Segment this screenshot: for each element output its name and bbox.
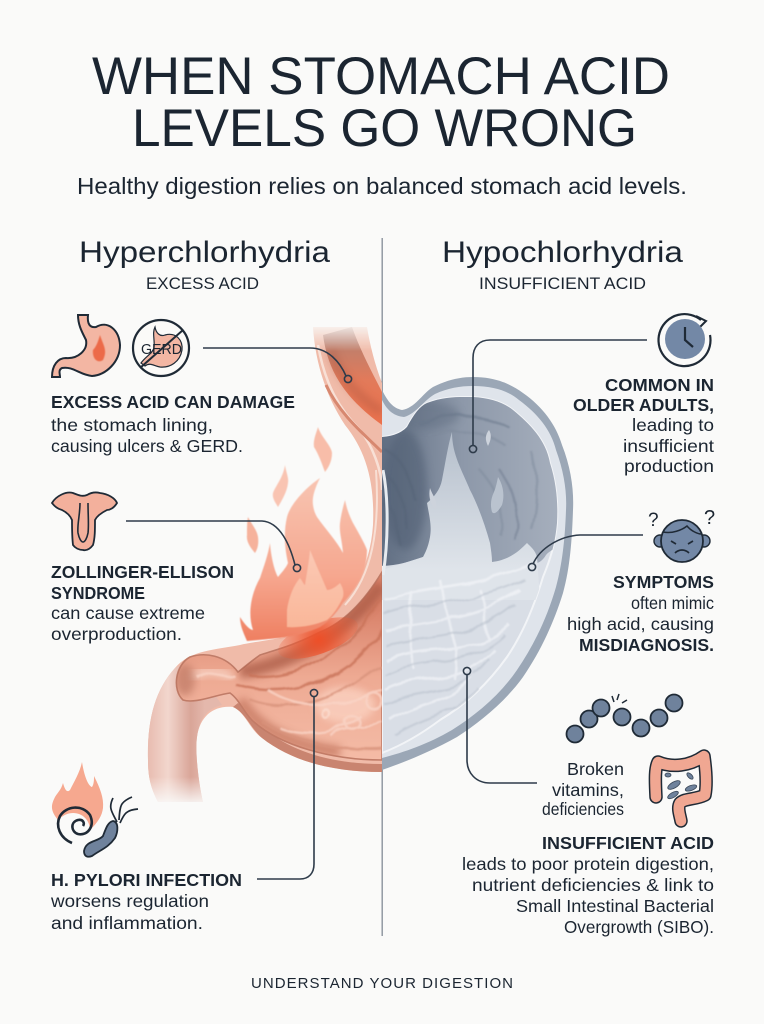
- text: older adults: insufficient: [623, 436, 714, 456]
- callout line: Zollinger: [126, 521, 301, 572]
- title: [92, 47, 670, 158]
- text: excess acid: EXCESS ACID CAN DAMAGE: [51, 392, 295, 412]
- text: older adults: COMMON IN: [605, 375, 714, 395]
- mucosal folds: [196, 600, 383, 748]
- text: broken vitamins: deficiencies: [542, 799, 624, 819]
- stomach illustration: acid side: [148, 327, 383, 802]
- acid flames: [240, 427, 367, 641]
- heading: hyperchlorhydria: Hyperchlorhydria: [79, 236, 330, 269]
- inflamed patch: [278, 617, 358, 659]
- text: excess acid: causing ulcers & GERD.: [51, 436, 243, 456]
- icon: inflamed stomach: [52, 315, 120, 377]
- callout line: older adults: [469, 340, 647, 453]
- inner flame: [287, 550, 343, 627]
- highlight along wall: [383, 470, 387, 575]
- text: symptoms: [567, 572, 714, 655]
- icon: clock: [659, 314, 711, 366]
- text: insufficient acid: [462, 833, 714, 937]
- text: broken vitamins: vitamins,: [552, 780, 624, 800]
- icon: flame and bacterium: [52, 762, 138, 857]
- text: insufficient acid: Overgrowth (SIBO).: [564, 917, 714, 937]
- text: older adults: leading to: [632, 415, 714, 435]
- text: symptoms: high acid, causing: [567, 614, 714, 634]
- icon: GERD crossed stomach: [133, 320, 189, 376]
- text: older adults: [573, 375, 714, 476]
- heading: hypochlorhydria: Hypochlorhydria: [442, 236, 683, 269]
- callout line: H. pylori: [257, 689, 318, 879]
- wall and esophagus: [148, 327, 382, 802]
- icon: GERD crossed stomach: GERD: [141, 342, 182, 358]
- text: zollinger-ellison: SYNDROME: [51, 583, 145, 603]
- text: excess acid: [51, 392, 295, 456]
- stomach illustration: low acid side: [378, 377, 573, 770]
- text: symptoms: often mimic: [631, 593, 714, 613]
- text: broken vitamins: [542, 759, 624, 819]
- esophagus lumen: [323, 327, 382, 425]
- duodenum tube: [148, 660, 222, 802]
- heading: hyperchlorhydria: [79, 236, 330, 293]
- icon: intestine with bacteria: [655, 756, 706, 821]
- text: insufficient acid: Small Intestinal Bacterial: [516, 896, 714, 916]
- text: broken vitamins: Broken: [567, 759, 624, 779]
- icon: confused person: ?: [648, 510, 659, 531]
- text: older adults: OLDER ADULTS,: [573, 395, 714, 415]
- shaded upper cavity: [382, 397, 558, 736]
- icon: broken vitamin chain: [566, 694, 682, 742]
- icon: confused person: [648, 507, 715, 562]
- center divider: [382, 238, 383, 936]
- heading: hypochlorhydria: INSUFFICIENT ACID: [479, 274, 646, 293]
- subtitle: Healthy digestion relies on balanced stomach acid levels.: [77, 173, 687, 199]
- text: insufficient acid: nutrient deficiencies & link to: [472, 875, 714, 895]
- light wall band: [382, 386, 566, 758]
- side flames: [247, 517, 258, 553]
- callout line: GERD: [203, 348, 352, 383]
- small pale flames: [491, 477, 503, 513]
- text: older adults: production: [624, 456, 714, 476]
- heading: hyperchlorhydria: EXCESS ACID: [146, 274, 259, 293]
- main flame: [240, 478, 367, 641]
- text: zollinger-ellison: [51, 562, 234, 644]
- footer: UNDERSTAND YOUR DIGESTION: [251, 975, 513, 992]
- text: h. pylori: worsens regulation: [50, 891, 209, 911]
- text: zollinger-ellison: overproduction.: [51, 624, 182, 644]
- heading: hypochlorhydria: [442, 236, 683, 293]
- title: WHEN STOMACH ACID: [92, 47, 670, 106]
- text: insufficient acid: INSUFFICIENT ACID: [542, 833, 714, 853]
- stomach cavity: [176, 572, 382, 760]
- text: h. pylori: H. PYLORI INFECTION: [51, 870, 242, 890]
- text: excess acid: the stomach lining,: [51, 415, 213, 435]
- fold texture: [385, 565, 530, 720]
- title: LEVELS GO WRONG: [132, 99, 637, 158]
- cavity base: [382, 397, 557, 753]
- callout line: symptoms: [528, 535, 643, 571]
- upper folds: [454, 413, 538, 540]
- text: symptoms: SYMPTOMS: [613, 572, 714, 592]
- text: zollinger-ellison: ZOLLINGER-ELLISON: [51, 562, 234, 582]
- shaded folds: [175, 585, 382, 752]
- callout line: broken vitamins: [463, 667, 537, 783]
- text: zollinger-ellison: can cause extreme: [51, 603, 205, 623]
- icon: confused person: ?: [704, 507, 715, 529]
- pale flame: [382, 432, 540, 600]
- text: h. pylori: [50, 870, 242, 933]
- text: h. pylori: and inflammation.: [51, 913, 203, 933]
- text: insufficient acid: leads to poor protein digestion,: [462, 854, 714, 874]
- icon: pancreas gland: [52, 492, 117, 550]
- outer rim: [382, 377, 573, 770]
- text: symptoms: MISDIAGNOSIS.: [579, 635, 714, 655]
- outer lower rim: [233, 703, 382, 772]
